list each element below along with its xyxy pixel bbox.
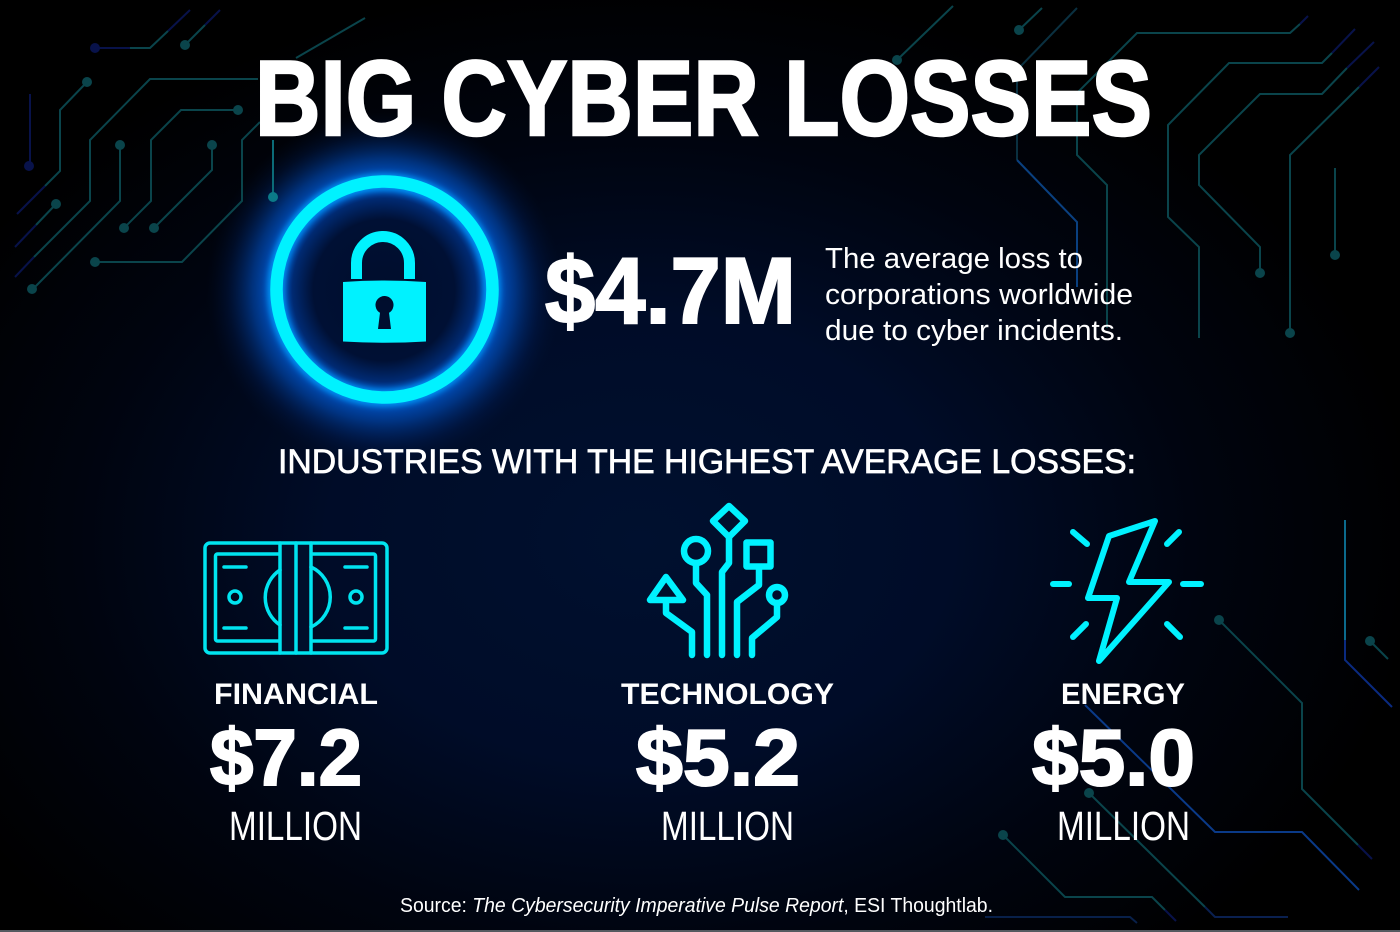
unit: MILLION [1057, 803, 1190, 849]
label: FINANCIAL [214, 678, 378, 711]
unit: MILLION [661, 803, 794, 849]
section heading: INDUSTRIES WITH THE HIGHEST AVERAGE LOSSES: [278, 443, 1136, 481]
amount: $5.0 [1032, 713, 1195, 802]
circuit lines: top left [15, 10, 365, 294]
padlock [343, 236, 426, 343]
circuit lines: bottom right [985, 520, 1392, 923]
panel: financial [205, 543, 387, 849]
ring glow [206, 112, 562, 468]
stat: $4.7M: $4.7M [545, 238, 796, 343]
circuit lines: top right [892, 6, 1379, 338]
amount: $7.2 [210, 713, 362, 802]
icon: circuit tree [650, 506, 785, 655]
icon: padlock in glowing ring [206, 112, 562, 468]
description text [825, 243, 1133, 347]
bottom edge line [0, 930, 1400, 932]
unit: MILLION [229, 803, 362, 849]
title: BIG CYBER LOSSES [255, 38, 1152, 158]
source note: Source: The Cybersecurity Imperative Pulse Report, ESI Thoughtlab. [400, 895, 993, 917]
ring interior [280, 186, 488, 394]
icon: lightning bolt [1053, 521, 1201, 661]
line 1: The average loss to [825, 243, 1083, 275]
ring [276, 182, 492, 398]
amount: $5.2 [636, 713, 800, 802]
panel: technology [621, 506, 834, 849]
line 3: due to cyber incidents. [825, 315, 1123, 347]
label: TECHNOLOGY [621, 678, 834, 711]
ring soft edge [276, 182, 492, 398]
icon: banknotes [205, 543, 387, 653]
panel: energy [1032, 521, 1201, 849]
line 2: corporations worldwide [825, 279, 1133, 311]
label: ENERGY [1061, 678, 1185, 711]
